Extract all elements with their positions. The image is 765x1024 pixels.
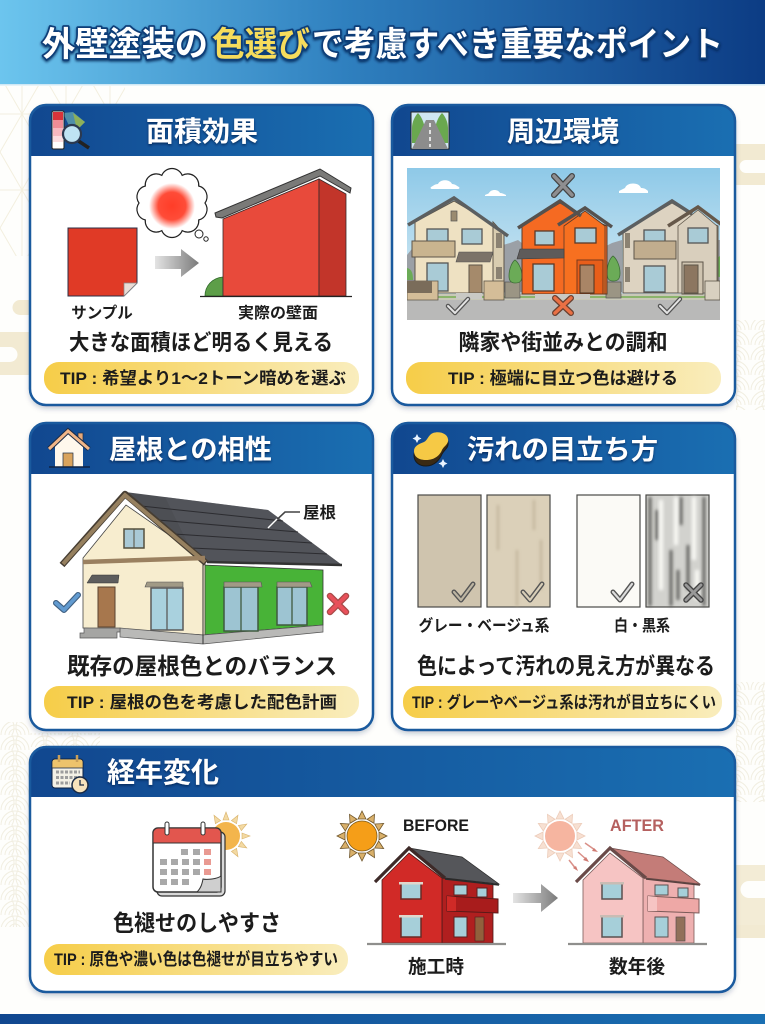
tip pill: TIP : グレーやベージュ系は汚れが目立ちにくい	[412, 692, 716, 712]
tip pill	[406, 362, 721, 394]
label: 数年後: 数年後	[609, 955, 665, 978]
tip pill: TIP : 極端に目立つ色は避ける	[448, 368, 678, 388]
panel: 屋根との相性	[30, 423, 373, 730]
tip pill	[44, 362, 359, 394]
icon: orange X mark	[555, 298, 571, 313]
panel: 汚れの目立ち方	[392, 423, 735, 730]
tip pill: TIP : 原色や濃い色は色褪せが目立ちやすい	[54, 949, 338, 969]
icon: house	[49, 431, 90, 467]
panel: 周辺環境	[392, 105, 735, 405]
heading: 経年変化: 経年変化	[107, 757, 219, 788]
icon: orange sun	[337, 811, 387, 861]
icon: sponge	[412, 432, 448, 468]
footer bar	[0, 1014, 765, 1024]
thought cloud with red glow	[137, 169, 208, 241]
subheading: 既存の屋根色とのバランス	[67, 653, 337, 679]
tip pill: TIP : 希望より1～2トーン暗めを選ぶ	[60, 368, 346, 388]
roof label with leader	[268, 504, 336, 528]
heading: 面積効果: 面積効果	[146, 116, 258, 147]
title banner	[0, 0, 765, 86]
title text: 外壁塗装の	[42, 26, 208, 64]
tip pill: TIP : 屋根の色を考慮した配色計画	[67, 692, 337, 712]
tip pill	[403, 686, 722, 718]
swatch: beige stained	[487, 495, 550, 607]
icon: right check	[660, 299, 680, 313]
icon: faded sun with rays	[535, 811, 598, 871]
arrow	[155, 249, 199, 277]
roof label with leader: 屋根	[303, 504, 336, 522]
panel: 経年変化	[30, 747, 735, 992]
sample square	[68, 228, 137, 296]
title text: 色選び	[212, 26, 310, 64]
subheading: 隣家や街並みとの調和	[458, 330, 668, 355]
title text	[42, 26, 723, 64]
label: AFTER: AFTER	[610, 816, 664, 835]
label: 白・黒系: 白・黒系	[614, 617, 670, 635]
title text: で考慮すべき重要なポイント	[312, 26, 723, 64]
trees and stone walls	[407, 256, 720, 298]
arrow	[513, 884, 558, 912]
icon: top X mark	[554, 176, 572, 195]
icon: road	[411, 112, 449, 149]
label: グレー・ベージュ系: グレー・ベージュ系	[418, 616, 550, 635]
label: 施工時: 施工時	[408, 956, 464, 978]
icon: calendar with sun	[153, 812, 250, 896]
subheading: 大きな面積ほど明るく見える	[69, 330, 333, 355]
panel: 面積効果	[30, 105, 373, 405]
icon: left check	[448, 299, 468, 313]
heading: 屋根との相性: 屋根との相性	[109, 435, 272, 465]
house: orange (bad)	[517, 201, 612, 299]
street scene	[407, 168, 722, 320]
house: after	[568, 848, 707, 944]
house: left beige	[407, 198, 508, 300]
label: 実際の壁面: 実際の壁面	[238, 304, 318, 322]
house: before	[367, 848, 506, 944]
heading: 汚れの目立ち方: 汚れの目立ち方	[467, 435, 658, 465]
subheading: 色褪せのしやすさ	[113, 911, 281, 936]
subheading: 色によって汚れの見え方が異なる	[417, 653, 715, 679]
label: サンプル: サンプル	[71, 304, 133, 322]
tip pill	[44, 944, 348, 975]
heading: 周辺環境: 周辺環境	[507, 116, 619, 147]
icon: calendar and clock	[52, 755, 88, 793]
icon: blue check	[56, 595, 78, 610]
tip pill	[44, 686, 359, 718]
swatch: white stained	[646, 495, 709, 607]
actual wall building	[200, 169, 352, 296]
icon: red X	[330, 596, 346, 612]
swatch: beige plain	[418, 495, 481, 607]
label: BEFORE: BEFORE	[403, 816, 469, 835]
swatch: white plain	[577, 495, 640, 607]
house illustration	[62, 492, 342, 644]
house: right grey-beige	[618, 201, 722, 300]
icon: colour swatch and magnifier	[52, 111, 89, 149]
